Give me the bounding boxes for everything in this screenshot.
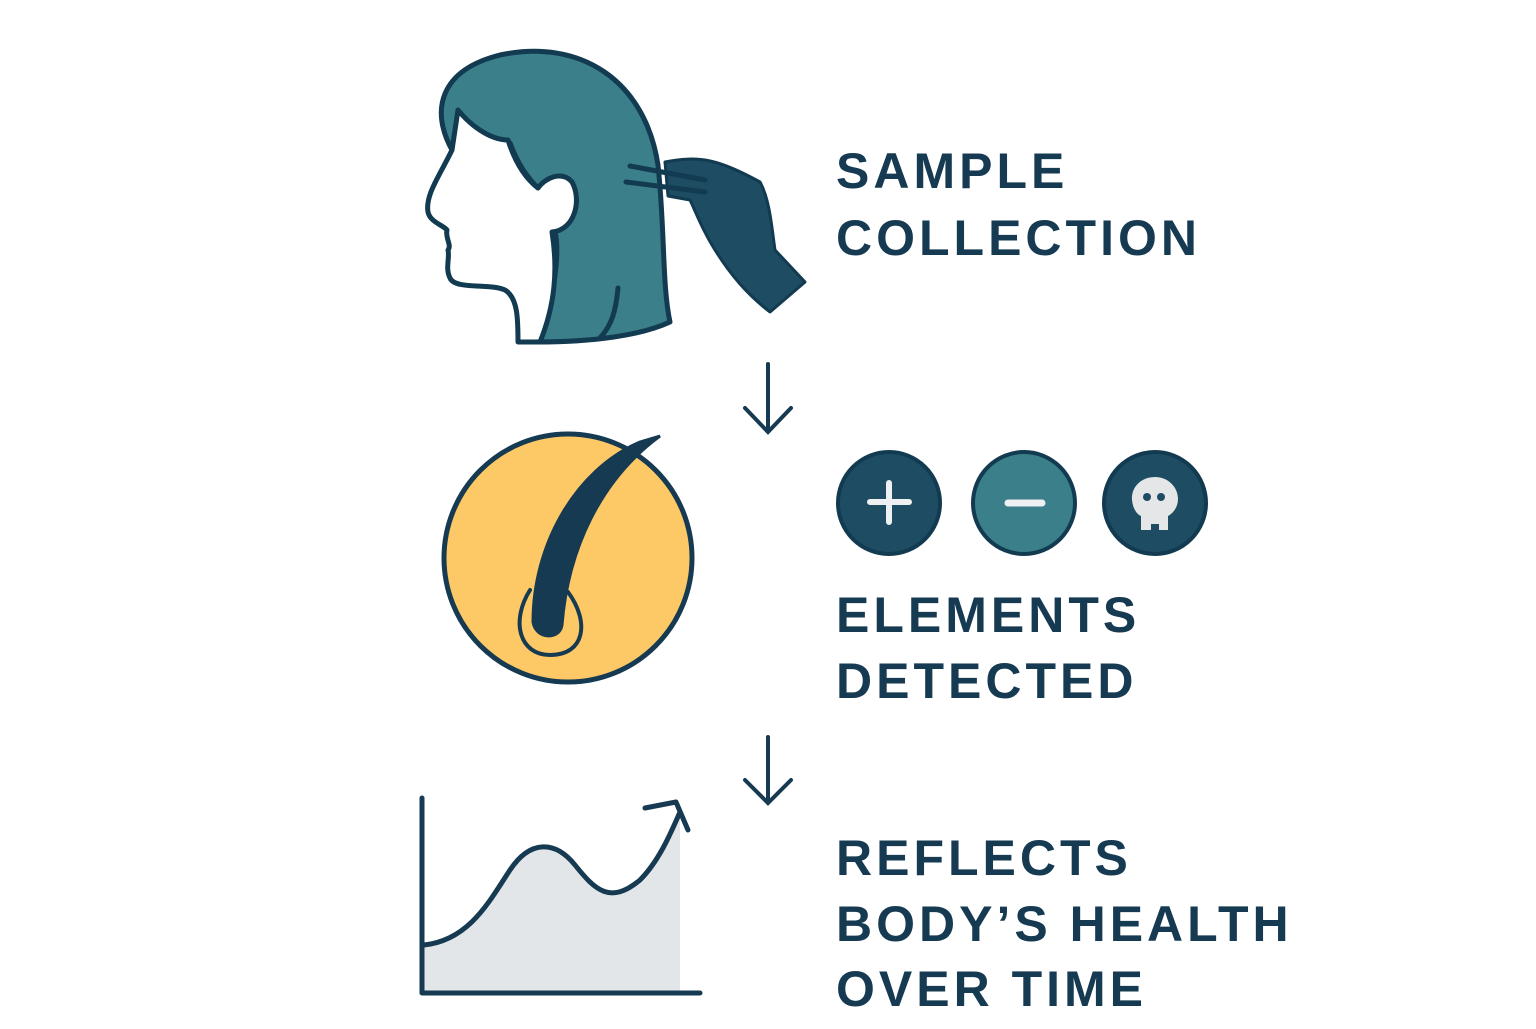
title: sample collection: SAMPLE	[836, 143, 1068, 199]
title: elements detected: DETECTED	[836, 653, 1137, 709]
title: reflects body's health: OVER TIME	[836, 961, 1147, 1017]
icon: hair follicle in yellow circle	[444, 434, 692, 682]
icons: element circles	[838, 452, 1206, 554]
title: reflects body's health	[836, 830, 1293, 1017]
title: elements detected	[836, 587, 1140, 709]
arrow 1	[745, 364, 791, 432]
title: elements detected: ELEMENTS	[836, 587, 1140, 643]
arrow 2	[745, 737, 791, 803]
title: reflects body's health: BODY’S HEALTH	[836, 896, 1293, 952]
icon: head with hair sample	[428, 51, 805, 342]
title: sample collection: COLLECTION	[836, 210, 1201, 266]
title: reflects body's health: REFLECTS	[836, 830, 1132, 886]
chart: health over time	[422, 798, 700, 993]
hand with tweezers	[665, 159, 805, 312]
hair	[441, 51, 670, 342]
face	[428, 110, 576, 342]
title: sample collection	[836, 143, 1201, 266]
